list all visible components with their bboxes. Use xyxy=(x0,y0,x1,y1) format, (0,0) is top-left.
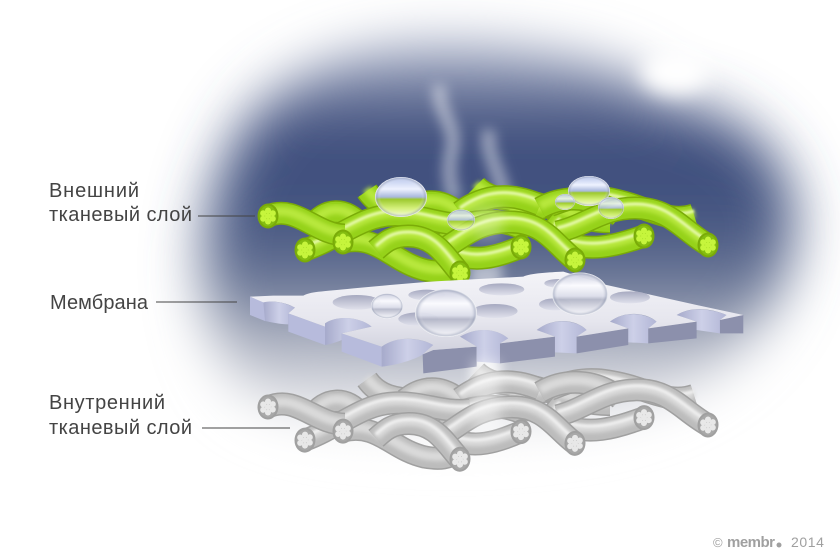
label: membrane: Мембрана xyxy=(50,292,149,314)
water droplets on outer fabric xyxy=(375,176,624,230)
steam rising through upper layers xyxy=(439,85,505,400)
copyright: © xyxy=(713,535,723,550)
label: outer fabric layer xyxy=(49,180,255,226)
inner fabric layer (grey) xyxy=(258,364,718,477)
label: outer fabric layer: Внешний xyxy=(49,180,139,202)
label: inner fabric layer xyxy=(49,392,290,439)
label: inner fabric layer: тканевый слой xyxy=(49,417,192,439)
haze notch at upper right xyxy=(641,50,709,94)
membrane top surface xyxy=(250,272,743,354)
copyright xyxy=(713,534,825,551)
copyright: 2014 xyxy=(791,534,825,550)
membrane side faces xyxy=(250,297,743,373)
membrane pores xyxy=(333,279,650,326)
label: inner fabric layer: Внутренний xyxy=(49,392,165,414)
membrane sheet with pores xyxy=(250,272,743,373)
outer fabric layer (green) xyxy=(258,184,718,286)
label: outer fabric layer: тканевый слой xyxy=(49,204,192,226)
steam over the outer fabric xyxy=(470,205,505,240)
copyright: membr xyxy=(727,534,775,551)
water droplets on membrane xyxy=(371,272,608,337)
background: blurred blue haze xyxy=(204,45,794,430)
steam over the inner fabric xyxy=(472,360,500,430)
